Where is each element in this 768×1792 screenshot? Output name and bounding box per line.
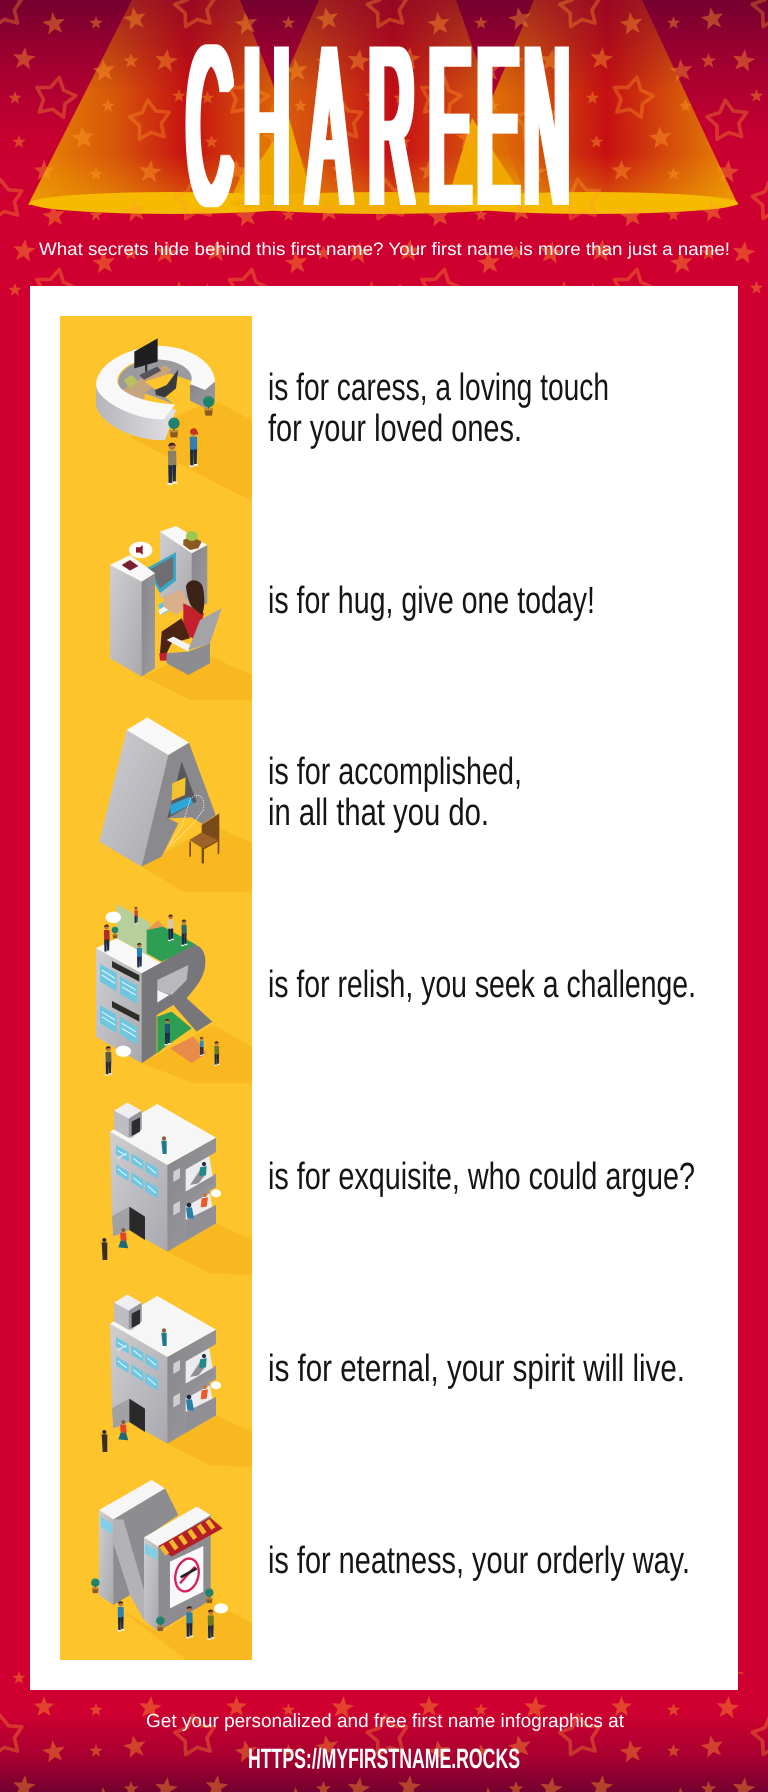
star pattern: footer (0, 1672, 768, 1792)
icon: second letter E building (102, 1295, 252, 1467)
text: A: is for accomplished, (268, 751, 522, 793)
text: C: is for caress, a loving touch (268, 367, 609, 409)
text: A (268, 751, 522, 834)
text: H: is for hug, give one today! (268, 580, 595, 622)
icon: letter A (99, 717, 252, 892)
footer text: Get your personalized and free first name infographics at (146, 1711, 625, 1732)
subtitle: What secrets hide behind this first name? Your first name is more than just a name! (39, 239, 730, 259)
icon: letter E building (102, 1103, 252, 1275)
icon: letter R (96, 904, 252, 1083)
text: C: for your loved ones. (268, 408, 522, 450)
star pattern: header (0, 0, 768, 300)
text: A: in all that you do. (268, 792, 489, 834)
spotlights (28, 0, 738, 214)
panel: white content card (30, 286, 738, 1690)
panel: yellow illustration strip (60, 316, 252, 1660)
title: CHAREEN (187, 0, 570, 252)
icon: letter C reception desk (96, 338, 252, 501)
icon: letter N shop (91, 1480, 252, 1660)
footer url: HTTPS://MYFIRSTNAME.ROCKS (248, 1743, 520, 1774)
text: C (268, 367, 609, 450)
icon: letter H office desk (110, 526, 252, 700)
